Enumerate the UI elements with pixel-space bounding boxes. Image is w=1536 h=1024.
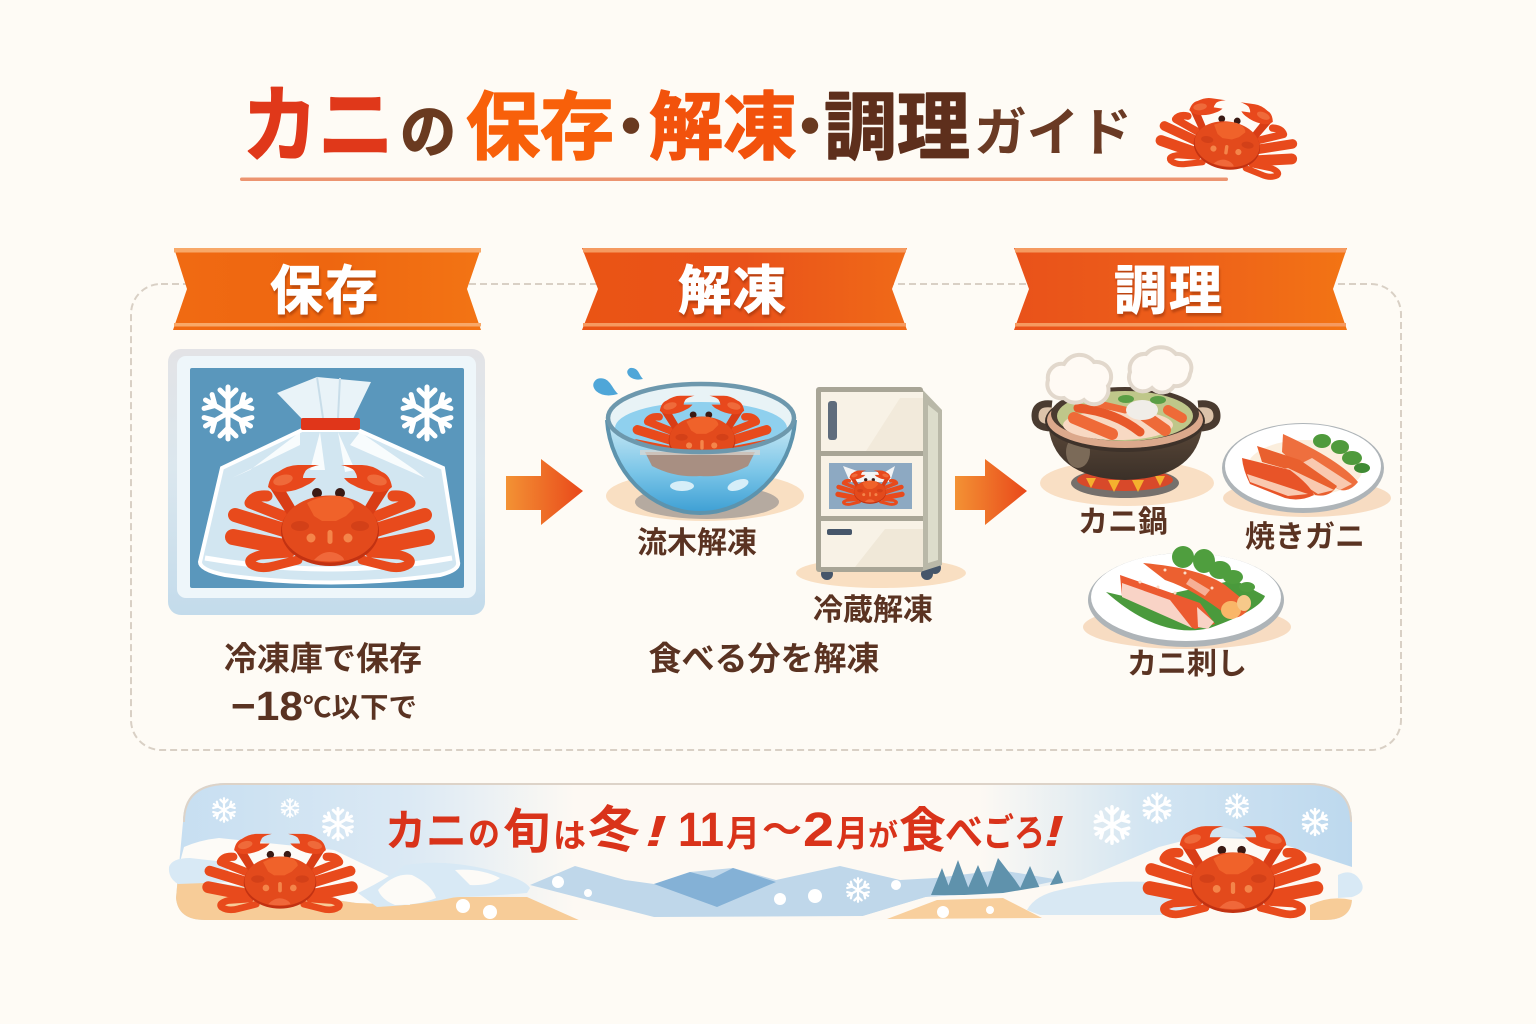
season message: べ <box>945 811 983 855</box>
season message: が <box>868 819 898 853</box>
banner scene background <box>170 780 1360 925</box>
title: 解凍 <box>649 86 797 169</box>
illustration: crab hot pot <box>1035 347 1217 506</box>
arrow: storage to thawing <box>506 459 583 525</box>
banner: winter season <box>169 780 1363 925</box>
arrow: thawing to cooking <box>955 459 1027 525</box>
season message: 月 <box>726 813 760 854</box>
right snow blob <box>1338 872 1363 898</box>
panel: process frame <box>131 284 1401 750</box>
label: カニ刺し: カニ刺し <box>1127 648 1247 681</box>
season message: 〜 <box>762 809 802 850</box>
season message: 月 <box>836 813 868 854</box>
season message: カニ <box>385 807 467 856</box>
title: 調理 <box>824 86 970 169</box>
icon: left banner crab <box>208 834 352 910</box>
season message: ごろ <box>983 813 1045 855</box>
season message: 冬 <box>588 802 640 858</box>
season message: の <box>468 816 500 854</box>
label: 焼きガニ: 焼きガニ <box>1245 521 1365 554</box>
icon: title crab <box>1158 92 1298 179</box>
banner: 保存: 保存 <box>270 262 380 321</box>
infographic canvas <box>130 86 1402 920</box>
season message: ! <box>645 807 667 856</box>
title <box>242 79 1132 173</box>
title underline <box>240 178 1228 181</box>
season message: 旬 <box>503 806 550 859</box>
label: 冷蔵解凍: 冷蔵解凍 <box>813 594 933 627</box>
season message: 11 <box>678 804 724 857</box>
left snow blob <box>169 858 232 884</box>
illustration: frozen crab in bag in freezer <box>168 349 485 615</box>
banner: 保存 <box>173 248 481 330</box>
season message: ! <box>1044 807 1064 856</box>
label: 流木解凍: 流木解凍 <box>637 527 757 560</box>
text: freezer instruction: −18 <box>231 683 303 729</box>
snowflakes <box>212 794 1328 919</box>
banner: 解凍: 解凍 <box>678 262 788 321</box>
text: freezer instruction: 冷凍庫で保存 <box>224 640 422 677</box>
banner: 調理 <box>1014 248 1347 330</box>
illustration: crab sashimi plate <box>1083 546 1291 649</box>
text: freezer instruction: ℃以下で <box>303 692 417 723</box>
title: 保存 <box>466 86 614 169</box>
title: の <box>400 100 456 165</box>
text: thaw instruction: 食べる分を解凍 <box>648 640 880 677</box>
title: ・ <box>778 92 842 164</box>
season message: 2 <box>803 804 834 857</box>
season message: は <box>553 817 586 854</box>
text: freezer instruction <box>224 640 422 729</box>
label: カニ鍋: カニ鍋 <box>1078 506 1168 539</box>
season message <box>385 802 1064 859</box>
title: ガイド <box>974 105 1132 163</box>
illustration: grilled crab plate <box>1222 423 1391 517</box>
illustration: refrigerator thawing <box>796 387 966 588</box>
season message: 食 <box>899 805 946 858</box>
banner: 調理: 調理 <box>1114 262 1224 321</box>
title: カニ <box>242 79 394 173</box>
icon: right banner crab <box>1150 826 1316 914</box>
title: ・ <box>599 92 663 164</box>
illustration: running-water thawing bowl <box>593 368 804 521</box>
banner: 解凍 <box>582 248 907 330</box>
